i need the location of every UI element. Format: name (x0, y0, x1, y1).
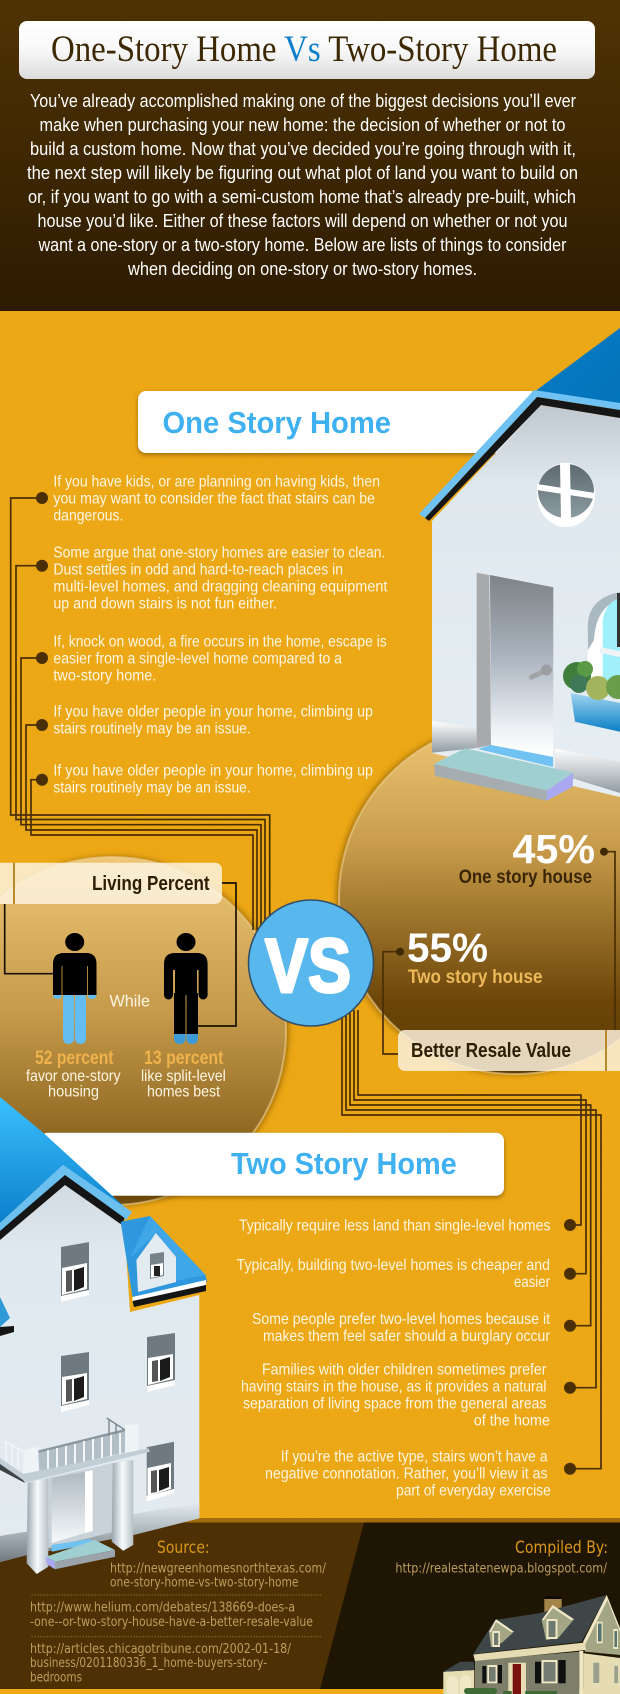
two story list text: having stairs in the house, as it provides a natural (241, 1379, 546, 1396)
stat: 13 percent: 13 percent (144, 1048, 224, 1069)
right dormer (542, 1605, 574, 1640)
stat: 45 percent: One story house (459, 867, 592, 888)
stat: 13 percent: homes best (147, 1084, 220, 1101)
source links (30, 1562, 327, 1686)
dormer wall (136, 1233, 176, 1292)
title bar (19, 21, 595, 79)
two story list text: If you’re the active type, stairs won’t have a (281, 1449, 548, 1466)
front wall (475, 1652, 579, 1694)
one story list text: dangerous. (53, 508, 123, 525)
footer panel: source (0, 1522, 364, 1689)
stat: 52 percent: housing (48, 1084, 99, 1101)
plants (563, 661, 620, 700)
stat: 55 percent: Two story house (408, 967, 542, 988)
stat: 52 percent: favor one-story (26, 1068, 121, 1085)
two story list text: Families with older children sometimes prefer (262, 1362, 546, 1379)
stat: 45 percent: 45% (512, 826, 595, 872)
roof fascia (0, 1165, 132, 1233)
intro paragraph: when deciding on one-story or two-story homes. (127, 259, 477, 279)
fascia (473, 1642, 586, 1661)
two story heading: Two Story Home (231, 1146, 457, 1181)
posts (23, 1447, 38, 1478)
while label: While (110, 992, 150, 1011)
two story list text: Typically, building two-level homes is cheaper and (236, 1257, 550, 1274)
title: One-Story Home Vs Two-Story Home (51, 29, 557, 70)
VS badge: VS (265, 924, 351, 1009)
arched window (588, 592, 620, 690)
connector lines: VS to two story list (342, 1010, 601, 1469)
living percent label: Living Percent (92, 873, 210, 895)
stat: 13 percent: like split-level (141, 1068, 226, 1085)
left column (27, 1478, 48, 1574)
intro paragraph: make when purchasing your new home: the decision of whether or not to (40, 115, 566, 135)
front step (434, 745, 573, 801)
door (477, 573, 553, 757)
upper wall and body (0, 1183, 199, 1562)
source links: http://newgreenhomesnorthtexas.com/ (110, 1562, 327, 1577)
shrubs (464, 1688, 557, 1694)
stat: 13 percent (141, 1048, 226, 1101)
source links: -one--or-two-story-house-have-a-better-resale-value (30, 1615, 313, 1630)
two story list text: makes them feel safer should a burglary occur (263, 1328, 550, 1345)
lower side wall (583, 1653, 620, 1694)
two story list text: of the home (474, 1413, 550, 1430)
house: two story (0, 1097, 207, 1574)
source links: one-story-home-vs-two-story-home (110, 1576, 298, 1591)
chimney (544, 1596, 562, 1614)
intro paragraph: the next step will likely be figuring out what plot of land you want to build on (27, 163, 578, 183)
house: one story (419, 328, 620, 801)
porch (27, 1460, 133, 1574)
one story heading: One Story Home (162, 405, 391, 440)
right column (112, 1460, 133, 1551)
one story list text (53, 474, 388, 797)
window 2 (147, 1333, 175, 1392)
connector lines: living percent (5, 883, 236, 1026)
baseboards (432, 721, 620, 793)
two story list text: negative connotation. Rather, you’ll view it as (265, 1466, 548, 1483)
intro paragraph: or, if you want to go with a semi-custom home that’s already pre-built, which (28, 187, 576, 207)
bullet dots: one story (36, 492, 48, 786)
wall (432, 405, 620, 797)
left dormer (489, 1619, 514, 1647)
windows (61, 1242, 175, 1502)
stat: 55 percent: 55% (407, 925, 488, 971)
two story list text: Some people prefer two-level homes because it (252, 1311, 551, 1328)
balcony (0, 1418, 150, 1483)
stat: 55 percent (407, 925, 542, 988)
better resale value label: Better Resale Value (411, 1040, 571, 1062)
roof (473, 1595, 607, 1654)
garage (443, 1662, 474, 1694)
door (508, 1663, 526, 1694)
better resale value label (398, 1030, 620, 1071)
two story label box (40, 1133, 504, 1196)
dormer roof (121, 1216, 207, 1307)
one story label box (138, 391, 538, 453)
flower box (563, 661, 620, 732)
bottom orange strip (0, 1689, 620, 1694)
window 3 (61, 1352, 89, 1412)
person icon: 52 percent (53, 933, 96, 1044)
two story list text: separation of living space from the general areas (243, 1396, 547, 1413)
main roof (0, 1097, 130, 1223)
footer house illustration (443, 1595, 620, 1694)
slab (0, 1448, 150, 1483)
intro paragraph: house you’d like. Either of these factors will depend on whether or not you (38, 211, 568, 231)
porch step (46, 1539, 115, 1569)
windows (482, 1622, 618, 1683)
circle panel: better resale value (339, 722, 620, 1074)
one story list text: If you have kids, or are planning on having kids, then (53, 474, 380, 491)
left wing roof (0, 1297, 14, 1336)
one story list text: two-story home. (53, 668, 156, 685)
intro paragraph: want a one-story or a two-story home. Below are lists of things to consider (38, 235, 567, 255)
circle panel: living percent (0, 857, 286, 1205)
VS badge (248, 900, 374, 1026)
two story list text: Typically require less land than single-level homes (239, 1218, 551, 1235)
window 1 (61, 1242, 89, 1302)
one story list text: If, knock on wood, a fire occurs in the home, escape is (53, 634, 387, 651)
one story list text: up and down stairs is not fun either. (53, 596, 277, 613)
two story list text (236, 1218, 551, 1500)
window 4 (147, 1442, 174, 1502)
two story list text: part of everyday exercise (396, 1483, 551, 1500)
stat: 45 percent (459, 826, 595, 888)
living percent panel contents (0, 863, 236, 1101)
footer panel: compiled by (0, 1522, 620, 1689)
source links: bedrooms (30, 1671, 82, 1686)
one story list text: multi-level homes, and dragging cleaning equipment (53, 579, 388, 596)
one story list text: easier from a single-level home compared to a (53, 651, 342, 668)
stat: 52 percent (26, 1048, 121, 1101)
base band (0, 1503, 199, 1562)
one story list text: Dust settles in odd and hard-to-reach places in (53, 562, 343, 579)
roof (534, 328, 620, 408)
railing (4, 1418, 128, 1472)
one story list text: If you have older people in your home, climbing up (53, 763, 373, 780)
connector lines: one story list to VS (11, 498, 270, 930)
one story list text: you may want to consider the fact that stairs can be (53, 491, 375, 508)
gable wall (583, 1595, 620, 1655)
source links: http://articles.chicagotribune.com/2002-01-18/ (30, 1642, 292, 1657)
source heading: Source: (157, 1538, 210, 1558)
two story list text: easier (514, 1274, 550, 1291)
source links: http://www.helium.com/debates/138669-does-a (30, 1601, 295, 1616)
one story list text: stairs routinely may be an issue. (53, 721, 251, 738)
resale value panel contents (383, 826, 620, 1071)
door handle (528, 664, 552, 681)
footer band (0, 1518, 620, 1522)
one story list text: Some argue that one-story homes are easier to clean. (53, 545, 385, 562)
source links: business/0201180336_1_home-buyers-story- (30, 1656, 267, 1671)
stat: 52 percent: 52 percent (35, 1048, 114, 1069)
one story list text: stairs routinely may be an issue. (53, 780, 251, 797)
person icon: 13 percent (164, 933, 208, 1044)
living percent label (0, 863, 222, 904)
one story list text: If you have older people in your home, climbing up (53, 704, 373, 721)
intro paragraph: build a custom home. Now that you’ve decided you’re going through with it, (30, 139, 576, 159)
connector lines: resale (383, 848, 615, 1054)
header background (0, 0, 620, 311)
round window (537, 463, 595, 527)
intro paragraph (27, 91, 578, 279)
bullet dots: two story (564, 1219, 576, 1475)
